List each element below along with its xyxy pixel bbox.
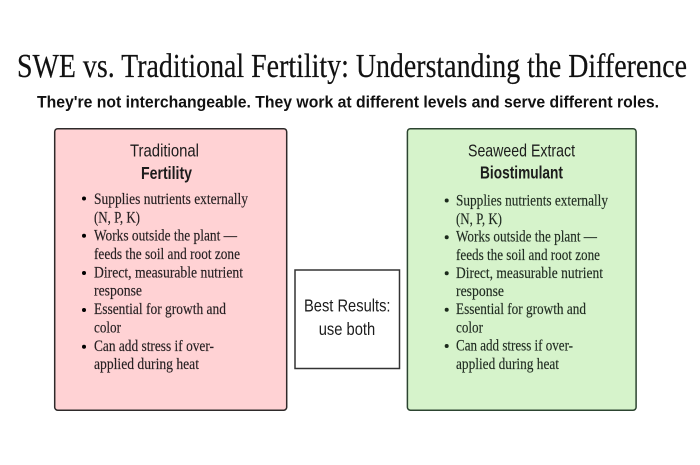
callout box: [295, 270, 400, 368]
subtitle: They're not interchangeable. They work at different levels and serve different roles.: [37, 92, 659, 112]
bullet list: biostimulant: Works outside the plant —: [456, 229, 597, 246]
bullet list: biostimulant: [445, 193, 608, 373]
bullet list: biostimulant: Direct, measurable nutrient: [456, 265, 604, 282]
bullet list: fertility: feeds the soil and root zone: [94, 246, 240, 263]
heading: Traditional: Traditional: [130, 140, 199, 160]
heading: Biostimulant: Biostimulant: [480, 163, 563, 183]
bullet list: fertility: Can add stress if over-: [94, 338, 214, 355]
callout: best results: [295, 270, 400, 368]
bullet list: biostimulant: Essential for growth and: [456, 301, 586, 318]
panel: seaweed extract biostimulant: [407, 129, 636, 410]
bullet list: biostimulant: Can add stress if over-: [456, 338, 573, 355]
bullet list: fertility: color: [94, 320, 122, 336]
panel: traditional fertility: [55, 129, 287, 410]
bullet list: biostimulant: (N, P, K): [456, 211, 502, 228]
callout text: use both: use both: [319, 319, 375, 339]
panel background: pink: [55, 129, 287, 410]
bullet list: biostimulant: Supplies nutrients externally: [456, 193, 608, 210]
panel background: green: [407, 129, 636, 410]
bullet list: biostimulant: feeds the soil and root zone: [456, 247, 600, 264]
bullet list: fertility: Works outside the plant —: [94, 228, 237, 245]
bullet list: fertility: Direct, measurable nutrient: [94, 264, 244, 281]
bullet list: biostimulant: response: [456, 283, 504, 300]
bullet list: biostimulant: color: [456, 319, 484, 336]
bullet list: fertility: Supplies nutrients externally: [94, 191, 248, 208]
bullet list: fertility: [82, 191, 248, 373]
bullet list: fertility: Essential for growth and: [94, 301, 226, 318]
heading: Fertility: Fertility: [141, 163, 192, 183]
bullet list: biostimulant: applied during heat: [456, 356, 560, 373]
bullet list: fertility: applied during heat: [94, 356, 200, 373]
callout text: Best Results: Best Results:: [304, 296, 390, 316]
bullet list: fertility: (N, P, K): [94, 210, 140, 226]
heading: Seaweed Extract: Seaweed Extract: [468, 140, 575, 160]
bullet list: fertility: response: [94, 283, 142, 300]
